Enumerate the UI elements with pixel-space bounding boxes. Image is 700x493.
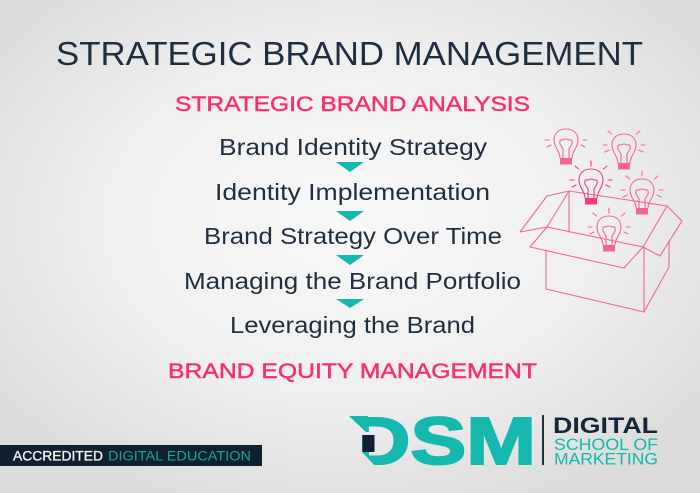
arrow 4 [336,299,364,308]
arrow 3 [336,255,364,265]
accreditation badge [0,445,262,466]
logo: digital school of marketing [345,404,658,479]
title: STRATEGIC BRAND MANAGEMENT [56,36,643,73]
icon: lightbulb 4 [621,171,663,214]
arrow 2 [336,211,364,221]
icon: box [520,191,682,312]
logo wordmark: DSM [350,404,536,479]
icon: lightbulb 3 [570,161,612,204]
logo text: school of: SCHOOL OF [554,435,658,454]
logo notch [362,435,374,452]
process flow [184,134,521,338]
step 1: Brand Identity Strategy [219,134,487,160]
icon: lightbulb 5 [588,208,630,252]
icon: lightbulb 1 [545,129,587,164]
arrow 1 [336,162,364,172]
illustration: open box with lightbulbs [520,129,682,312]
logo text: digital: DIGITAL [553,413,658,438]
step 4: Managing the Brand Portfolio [184,268,521,294]
heading: strategic brand analysis: STRATEGIC BRAND ANALYSIS [175,93,530,116]
heading: brand equity management: BRAND EQUITY MANAGEMENT [168,360,537,383]
logo divider [542,415,544,465]
accreditation badge: DIGITAL EDUCATION [108,448,251,464]
step 2: Identity Implementation [215,179,490,205]
icon: lightbulb 2 [603,131,645,170]
step 5: Leveraging the Brand [230,312,475,338]
step 3: Brand Strategy Over Time [204,223,502,249]
accreditation badge: ACCREDITED [13,448,103,464]
logo text: marketing: MARKETING [554,450,658,468]
